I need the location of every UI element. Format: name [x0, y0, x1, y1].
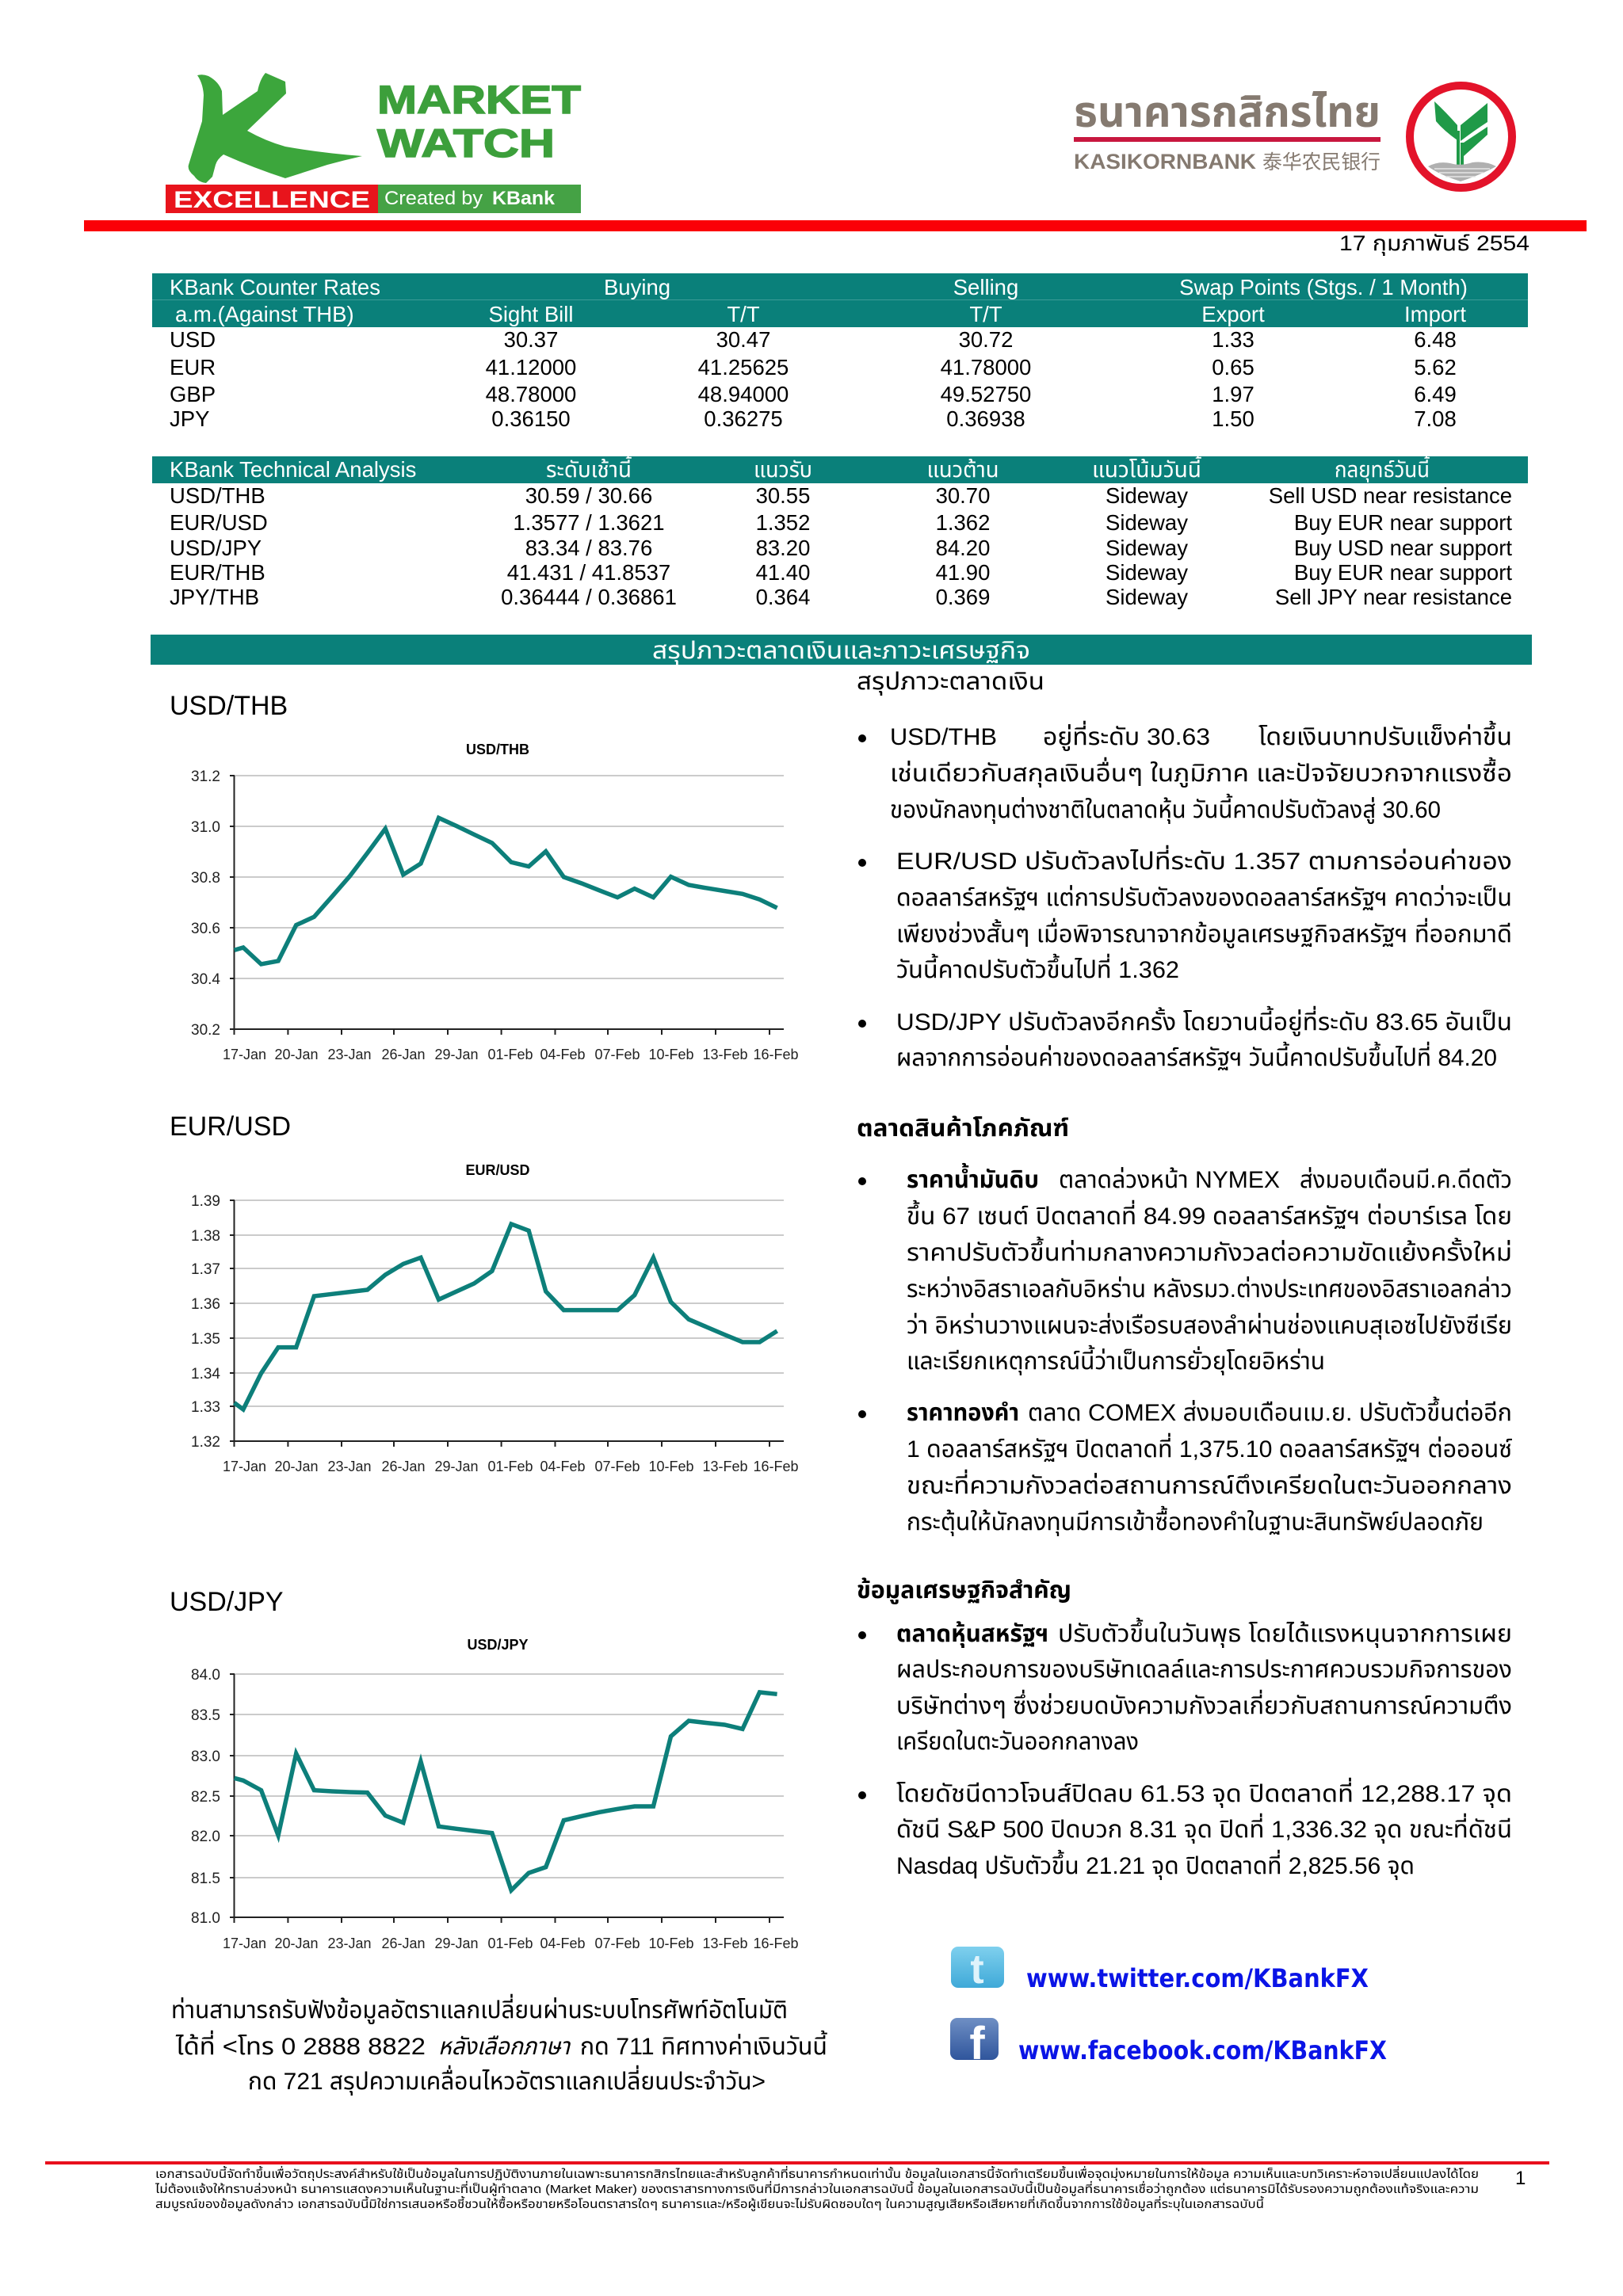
- wordmark rule: [1074, 137, 1381, 142]
- row USD/THB: Sell USD near resistance: [1269, 483, 1512, 508]
- x axis labels: 16-Feb: [753, 1459, 799, 1474]
- y axis labels: 30.4: [191, 971, 220, 988]
- table: KBank technical analysis: [152, 455, 1528, 609]
- bullet gold: 1 ดอลลาร์สหรัฐฯ ปิดตลาดที่ 1,375.10 ดอลลาร์สหรัฐฯ ต่อออนซ์: [907, 1432, 1513, 1463]
- row JPY: 7.08: [1414, 406, 1457, 431]
- note line 2: กด 711 ทิศทางค่าเงินวันนี้: [580, 2030, 827, 2060]
- bullet US stocks: [858, 1617, 1512, 1755]
- facebook url: www.facebook.com/KBankFX: [1018, 2035, 1387, 2065]
- x axis labels: [223, 1047, 799, 1062]
- red header bar: [84, 220, 1587, 231]
- KASIKORNBANK name: KASIKORNBANK: [1074, 150, 1257, 174]
- row USD/JPY: [170, 536, 1512, 560]
- y axis labels: 30.6: [191, 921, 220, 937]
- row JPY/THB: Sideway: [1106, 585, 1188, 609]
- x axis labels: 17-Jan: [223, 1936, 266, 1951]
- icon: twitter: t: [970, 1947, 984, 1993]
- x axis labels: 26-Jan: [381, 1047, 426, 1062]
- bullet US stocks: ผลประกอบการของบริษัทเดลล์และการประกาศควบรวมกิจการของ: [896, 1657, 1512, 1683]
- row USD: 1.33: [1212, 327, 1254, 352]
- bullet EUR/USD: วันนี้คาดปรับตัวขึ้นไปที่ 1.362: [896, 953, 1179, 983]
- chart title: USD/JPY: [467, 1637, 529, 1653]
- bullet indices: โดยดัชนีดาวโจนส์ปิดลบ 61.53 จุด ปิดตลาดที่ 12,288.17 จุด: [896, 1777, 1512, 1808]
- section banner: [151, 635, 1532, 665]
- x axis labels: 16-Feb: [753, 1047, 799, 1062]
- table header band: T/T: [727, 302, 760, 326]
- row USD/THB: 30.55: [756, 483, 810, 508]
- KASIKORNBANK name: 泰华农民银行: [1262, 151, 1381, 174]
- panel: commodity market: [857, 1116, 1513, 1536]
- row USD/THB: 30.70: [936, 483, 990, 508]
- note line 2: ได้ที่ <โทร 0 2888 8822: [175, 2030, 426, 2060]
- bullet US stocks: บริษัทต่างๆ ซึ่งช่วยบดบังความกังวลเกี่ยวกับสถานการณ์ความตึง: [896, 1689, 1512, 1719]
- row EUR: 41.12000: [486, 355, 576, 379]
- row USD: [170, 327, 1457, 352]
- y axis labels: [191, 1667, 220, 1927]
- row EUR/USD: Buy EUR near support: [1294, 510, 1512, 535]
- x axis labels: 23-Jan: [327, 1047, 372, 1062]
- phone service note: [171, 1993, 827, 2096]
- x axis labels: 26-Jan: [381, 1459, 426, 1474]
- row JPY/THB: JPY/THB: [170, 585, 259, 609]
- technical header band: ระดับเช้านี้: [546, 455, 632, 482]
- row JPY/THB: Sell JPY near resistance: [1275, 585, 1512, 609]
- bullet USD/THB: USD/THB: [890, 724, 997, 750]
- x axis labels: 23-Jan: [327, 1459, 372, 1474]
- panel: money market summary: [857, 669, 1512, 1071]
- y axis labels: [191, 769, 220, 1039]
- x axis labels: 07-Feb: [594, 1459, 640, 1474]
- row JPY: [170, 406, 1457, 431]
- x axis labels: 01-Feb: [487, 1047, 533, 1062]
- row JPY/THB: [170, 585, 1512, 609]
- icon: facebook: f: [969, 2018, 985, 2069]
- y axis labels: 1.36: [191, 1296, 220, 1313]
- bullet crude oil: ราคาน้ำมันดิบ: [907, 1162, 1039, 1193]
- y axis labels: 31.2: [191, 769, 220, 785]
- KasikornBank logo: [1074, 86, 1512, 188]
- row USD/JPY: Sideway: [1106, 536, 1188, 560]
- x axis labels: 17-Jan: [223, 1459, 266, 1474]
- row EUR/THB: 41.90: [936, 560, 990, 585]
- heading: ตลาดสินค้าโภคภัณฑ์: [857, 1116, 1069, 1142]
- x axis labels: 04-Feb: [540, 1936, 586, 1951]
- table header band: a.m.(Against THB): [175, 302, 354, 326]
- table header band: Sight Bill: [488, 302, 574, 326]
- disclaimer: สมบูรณ์ของข้อมูลดังกล่าว เอกสารฉบับนี้มิใช่การเสนอหรือชี้ชวนให้ซื้อหรือขายหรือโอนตราสารใดๆ ธนาคารและ/หรือผู้เขียนจะไม่รับผิดชอบใดๆ ในความสูญเสียหรือเสียหายที่เกิดขึ้นจากการใช้ข้อมูลที่ระบุในเอกสารฉบับนี้: [155, 2195, 1264, 2211]
- Created by KBank green tag: KBank: [492, 188, 556, 209]
- row USD/JPY: 84.20: [936, 536, 990, 560]
- table header band: Buying: [604, 275, 670, 299]
- row GBP: 6.49: [1414, 382, 1457, 406]
- Thai bank wordmark: ธนาคารกสิกรไทย: [1074, 89, 1381, 136]
- table: KBank counter rates: [152, 273, 1528, 431]
- bullet US stocks: เครียดในตะวันออกกลางลง: [896, 1729, 1139, 1755]
- row USD: USD: [170, 327, 216, 352]
- x axis labels: 23-Jan: [327, 1936, 372, 1951]
- y axis labels: 1.34: [191, 1366, 220, 1383]
- x axis labels: [223, 1936, 799, 1951]
- row EUR: 41.25625: [698, 355, 789, 379]
- bullet indices: Nasdaq ปรับตัวขึ้น 21.21 จุด ปิดตลาดที่ 2,825.56 จุด: [896, 1849, 1415, 1880]
- y axis labels: 83.0: [191, 1749, 220, 1765]
- chart heading: USD/JPY: [170, 1587, 284, 1617]
- bullet USD/JPY: USD/JPY ปรับตัวลงอีกครั้ง โดยวานนี้อยู่ที่ระดับ 83.65 อันเป็น: [896, 1005, 1512, 1036]
- row EUR/THB: EUR/THB: [170, 560, 265, 585]
- row JPY: 1.50: [1212, 406, 1254, 431]
- note line 2: [175, 2030, 827, 2060]
- y axis labels: 82.5: [191, 1789, 220, 1806]
- disclaimer: [155, 2165, 1479, 2211]
- chart: USD/JPY: [170, 1587, 799, 1951]
- chart title: USD/THB: [466, 742, 529, 757]
- row EUR/THB: [170, 560, 1512, 585]
- heading: สรุปภาวะตลาดเงิน: [857, 669, 1044, 696]
- technical header band: KBank Technical Analysis: [170, 457, 416, 482]
- x axis labels: 13-Feb: [702, 1936, 748, 1951]
- row JPY: 0.36275: [704, 406, 783, 431]
- y axis labels: 30.8: [191, 870, 220, 887]
- technical header band: กลยุทธ์วันนี้: [1335, 455, 1430, 482]
- line series: [235, 1224, 777, 1409]
- bullet USD/JPY: [858, 1005, 1512, 1071]
- bullet USD/JPY: ผลจากการอ่อนค่าของดอลลาร์สหรัฐฯ วันนี้คาดปรับขึ้นไปที่ 84.20: [896, 1041, 1497, 1071]
- row USD: 30.37: [504, 327, 558, 352]
- y axis labels: 1.39: [191, 1193, 220, 1210]
- row EUR/THB: 41.431 / 41.8537: [507, 560, 670, 585]
- bullet crude oil: ขึ้น 67 เซนต์ ปิดตลาดที่ 84.99 ดอลลาร์สหรัฐฯ ต่อบาร์เรล โดย: [907, 1199, 1512, 1230]
- note line 1: ท่านสามารถรับฟังข้อมูลอัตราแลกเปลี่ยนผ่านระบบโทรศัพท์อัตโนมัติ: [171, 1993, 788, 2024]
- chart: USD/THB: [170, 691, 799, 1062]
- bullet USD/THB: เช่นเดียวกับสกุลเงินอื่นๆ ในภูมิภาค และปัจจัยบวกจากแรงซื้อ: [890, 757, 1512, 788]
- x axis labels: 07-Feb: [594, 1936, 640, 1951]
- bullet gold: [858, 1396, 1513, 1536]
- table header band: Import: [1404, 302, 1466, 326]
- line series: [235, 818, 777, 964]
- bullet USD/THB: โดยเงินบาทปรับแข็งค่าขึ้น: [1258, 720, 1512, 750]
- x axis labels: [223, 1459, 799, 1474]
- technical header band: แนวรับ: [754, 457, 812, 482]
- y axis labels: 84.0: [191, 1667, 220, 1684]
- bullet gold: ตลาด COMEX ส่งมอบเดือนเม.ย. ปรับตัวขึ้นต่ออีก: [1028, 1396, 1512, 1426]
- bullet crude oil: ระหว่างอิสราเอลกับอิหร่าน หลังรมว.ต่างประเทศของอิสราเอลกล่าว: [907, 1276, 1512, 1302]
- bullet crude oil: ว่า อิหร่านวางแผนจะส่งเรือรบสองลำผ่านช่องแคบสุเอซไปยังซีเรีย: [907, 1313, 1512, 1340]
- note line 2: หลังเลือกภาษา: [438, 2034, 571, 2060]
- bullet crude oil: และเรียกเหตุการณ์นี้ว่าเป็นการยั่วยุโดยอิหร่าน: [907, 1344, 1325, 1375]
- row JPY: 0.36150: [491, 406, 571, 431]
- bullet USD/THB: ของนักลงทุนต่างชาติในตลาดหุ้น วันนี้คาดปรับตัวลงสู่ 30.60: [890, 793, 1441, 824]
- bullet EUR/USD: เพียงช่วงสั้นๆ เมื่อพิจารณาจากข้อมูลเศรษฐกิจสหรัฐฯ ที่ออกมาดี: [896, 917, 1512, 948]
- y axis labels: 1.33: [191, 1399, 220, 1416]
- gridlines and axes: [230, 1200, 784, 1447]
- bullet gold: กระตุ้นให้นักลงทุนมีการเข้าซื้อทองคำในฐานะสินทรัพย์ปลอดภัย: [907, 1505, 1484, 1536]
- icon: green K brush mark: [189, 73, 362, 183]
- technical header band: [152, 455, 1528, 483]
- page number: 1: [1515, 2168, 1526, 2189]
- table header band: KBank Counter Rates: [170, 275, 380, 299]
- bullet EUR/USD: EUR/USD ปรับตัวลงไปที่ระดับ 1.357 ตามการอ่อนค่าของ: [896, 845, 1512, 875]
- table header band: Export: [1201, 302, 1265, 326]
- row USD/THB: USD/THB: [170, 483, 265, 508]
- twitter url: www.twitter.com/KBankFX: [1026, 1963, 1369, 1993]
- row USD/THB: 30.59 / 30.66: [525, 483, 652, 508]
- Created by KBank green tag: [378, 185, 581, 213]
- row USD/JPY: USD/JPY: [170, 536, 262, 560]
- x axis labels: 01-Feb: [487, 1459, 533, 1474]
- footer rule: [45, 2161, 1549, 2164]
- row GBP: GBP: [170, 382, 216, 406]
- bullet USD/THB: [858, 720, 1512, 824]
- technical header band: แนวต้าน: [927, 457, 999, 482]
- line series: [235, 1692, 777, 1890]
- row EUR/USD: EUR/USD: [170, 510, 268, 535]
- row EUR/USD: 1.3577 / 1.3621: [513, 510, 665, 535]
- x axis labels: 20-Jan: [274, 1459, 319, 1474]
- bullet gold: ราคาทองคำ: [907, 1400, 1019, 1426]
- bullet gold: ขณะที่ความกังวลต่อสถานการณ์ตึงเครียดในตะวันออกกลาง: [907, 1469, 1512, 1499]
- x axis labels: 16-Feb: [753, 1936, 799, 1951]
- x axis labels: 29-Jan: [434, 1459, 479, 1474]
- note line 3: กด 721 สรุปความเคลื่อนไหวอัตราแลกเปลี่ยนประจำวัน>: [248, 2065, 766, 2096]
- bullet EUR/USD: ดอลลาร์สหรัฐฯ แต่การปรับตัวลงของดอลลาร์สหรัฐฯ คาดว่าจะเป็น: [896, 885, 1512, 911]
- x axis labels: 10-Feb: [648, 1459, 694, 1474]
- row USD/JPY: 83.20: [756, 536, 810, 560]
- KASIKORNBANK name: [1074, 150, 1381, 174]
- x axis labels: 04-Feb: [540, 1047, 586, 1062]
- icon: twitter: [951, 1947, 1004, 1993]
- row GBP: 49.52750: [941, 382, 1031, 406]
- icon: facebook: [950, 2018, 999, 2069]
- row EUR/THB: Buy EUR near support: [1294, 560, 1512, 585]
- twitter link: [951, 1947, 1369, 1993]
- x axis labels: 13-Feb: [702, 1047, 748, 1062]
- row JPY: 0.36938: [946, 406, 1025, 431]
- x axis labels: 10-Feb: [648, 1047, 694, 1062]
- bullet crude oil: ราคาปรับตัวขึ้นท่ามกลางความกังวลต่อความขัดแย้งครั้งใหม่: [907, 1236, 1512, 1266]
- bullet EUR/USD: [858, 845, 1512, 983]
- y axis labels: 1.32: [191, 1434, 220, 1451]
- y axis labels: 30.2: [191, 1022, 220, 1039]
- icon: red ring with rice plant: [1410, 86, 1512, 188]
- x axis labels: 26-Jan: [381, 1936, 426, 1951]
- row USD/THB: [170, 483, 1512, 508]
- chart: EUR/USD: [170, 1112, 799, 1474]
- x axis labels: 07-Feb: [594, 1047, 640, 1062]
- gridlines and axes: [230, 1674, 784, 1923]
- table header band: Selling: [953, 275, 1018, 299]
- row USD: 30.47: [716, 327, 770, 352]
- x axis labels: 13-Feb: [702, 1459, 748, 1474]
- y axis labels: 82.0: [191, 1829, 220, 1845]
- x axis labels: 01-Feb: [487, 1936, 533, 1951]
- row EUR: 41.78000: [941, 355, 1031, 379]
- technical header band: แนวโน้มวันนี้: [1092, 455, 1201, 482]
- K Market Watch logo: [166, 73, 581, 213]
- x axis labels: 29-Jan: [434, 1936, 479, 1951]
- bullet US stocks: ตลาดหุ้นสหรัฐฯ: [896, 1621, 1048, 1648]
- bullet US stocks: ปรับตัวขึ้นในวันพุธ โดยได้แรงหนุนจากการเผย: [1058, 1617, 1512, 1648]
- row GBP: 1.97: [1212, 382, 1254, 406]
- chart heading: EUR/USD: [170, 1112, 291, 1142]
- row EUR: EUR: [170, 355, 216, 379]
- row USD/THB: Sideway: [1106, 483, 1188, 508]
- bullet crude oil: ส่งมอบเดือนมี.ค.ดีดตัว: [1300, 1167, 1512, 1193]
- y axis labels: 1.35: [191, 1331, 220, 1348]
- chart heading: USD/THB: [170, 691, 288, 721]
- row EUR: 5.62: [1414, 355, 1457, 379]
- row JPY: JPY: [170, 406, 209, 431]
- disclaimer: ไม่ต้องแจ้งให้ทราบล่วงหน้า ธนาคารแสดงความเห็นในฐานะที่เป็นผู้ทำตลาด (Market Maker) ของตราสารทางการเงินที่มีการกล่าวในเอกสารฉบับนี้ ข้อมูลในเอกสารฉบับนี้เป็นข้อมูลที่ธนาคารเชื่อว่าถูกต้อง แต่ธนาคารมิได้รับรองความถูกต้องแท้จริงและความ: [155, 2180, 1479, 2196]
- row GBP: [170, 382, 1457, 406]
- row EUR/THB: 41.40: [756, 560, 810, 585]
- row EUR/USD: 1.362: [936, 510, 990, 535]
- y axis labels: 81.0: [191, 1910, 220, 1927]
- bullet USD/THB: อยู่ที่ระดับ 30.63: [1043, 720, 1210, 751]
- Excellence red tag: EXCELLENCE: [174, 187, 370, 213]
- bullet crude oil: ตลาดล่วงหน้า NYMEX: [1059, 1167, 1280, 1193]
- y axis labels: 1.37: [191, 1261, 220, 1278]
- bullet crude oil: [858, 1162, 1512, 1375]
- panel: key economic data: [857, 1577, 1512, 1880]
- row EUR/THB: Sideway: [1106, 560, 1188, 585]
- bullet indices: [858, 1777, 1512, 1880]
- y axis labels: 83.5: [191, 1707, 220, 1724]
- chart title: EUR/USD: [465, 1162, 530, 1178]
- row GBP: 48.94000: [698, 382, 789, 406]
- row EUR/USD: [170, 510, 1512, 535]
- row USD/JPY: 83.34 / 83.76: [525, 536, 652, 560]
- table header band: Swap Points (Stgs. / 1 Month): [1179, 275, 1468, 299]
- table header band: T/T: [969, 302, 1002, 326]
- row EUR: 0.65: [1212, 355, 1254, 379]
- x axis labels: 20-Jan: [274, 1047, 319, 1062]
- WATCH wordmark: WATCH: [377, 121, 555, 166]
- x axis labels: 29-Jan: [434, 1047, 479, 1062]
- table header band: [152, 273, 1528, 327]
- y axis labels: 1.38: [191, 1228, 220, 1245]
- x axis labels: 04-Feb: [540, 1459, 586, 1474]
- row EUR/USD: 1.352: [756, 510, 810, 535]
- row JPY/THB: 0.369: [936, 585, 990, 609]
- section banner: สรุปภาวะตลาดเงินและภาวะเศรษฐกิจ: [652, 638, 1030, 665]
- y axis labels: 81.5: [191, 1871, 220, 1887]
- row JPY/THB: 0.364: [756, 585, 810, 609]
- row USD: 6.48: [1414, 327, 1457, 352]
- row USD/JPY: Buy USD near support: [1294, 536, 1512, 560]
- row EUR: [170, 355, 1457, 379]
- x axis labels: 10-Feb: [648, 1936, 694, 1951]
- row EUR/USD: Sideway: [1106, 510, 1188, 535]
- disclaimer: เอกสารฉบับนี้จัดทำขึ้นเพื่อวัตถุประสงค์สำหรับใช้เป็นข้อมูลในการปฏิบัติงานภายในเฉพาะธนาคารกสิกรไทยและสำหรับลูกค้าที่ธนาคารกำหนดเท่านั้น ข้อมูลในเอกสารนี้จัดทำเตรียมขึ้นเพื่อจุดมุ่งหมายในการให้ข้อมูล ความเห็นและบทวิเคราะห์อาจเปลี่ยนแปลงได้โดย: [155, 2165, 1479, 2181]
- MARKET wordmark: MARKET: [377, 78, 581, 122]
- x axis labels: 17-Jan: [223, 1047, 266, 1062]
- Created by KBank green tag: Created by: [384, 188, 483, 209]
- bullet indices: ดัชนี S&P 500 ปิดบวก 8.31 จุด ปิดที่ 1,336.32 จุด ขณะที่ดัชนี: [896, 1813, 1512, 1844]
- heading: ข้อมูลเศรษฐกิจสำคัญ: [857, 1577, 1071, 1604]
- gridlines and axes: [230, 776, 784, 1035]
- row JPY/THB: 0.36444 / 0.36861: [501, 585, 677, 609]
- Excellence red tag: [166, 185, 378, 213]
- row USD: 30.72: [959, 327, 1013, 352]
- y axis labels: [191, 1193, 220, 1451]
- facebook link: [950, 2018, 1387, 2069]
- report date: 17 กุมภาพันธ์ 2554: [1339, 231, 1529, 256]
- y axis labels: 31.0: [191, 819, 220, 836]
- x axis labels: 20-Jan: [274, 1936, 319, 1951]
- row GBP: 48.78000: [486, 382, 576, 406]
